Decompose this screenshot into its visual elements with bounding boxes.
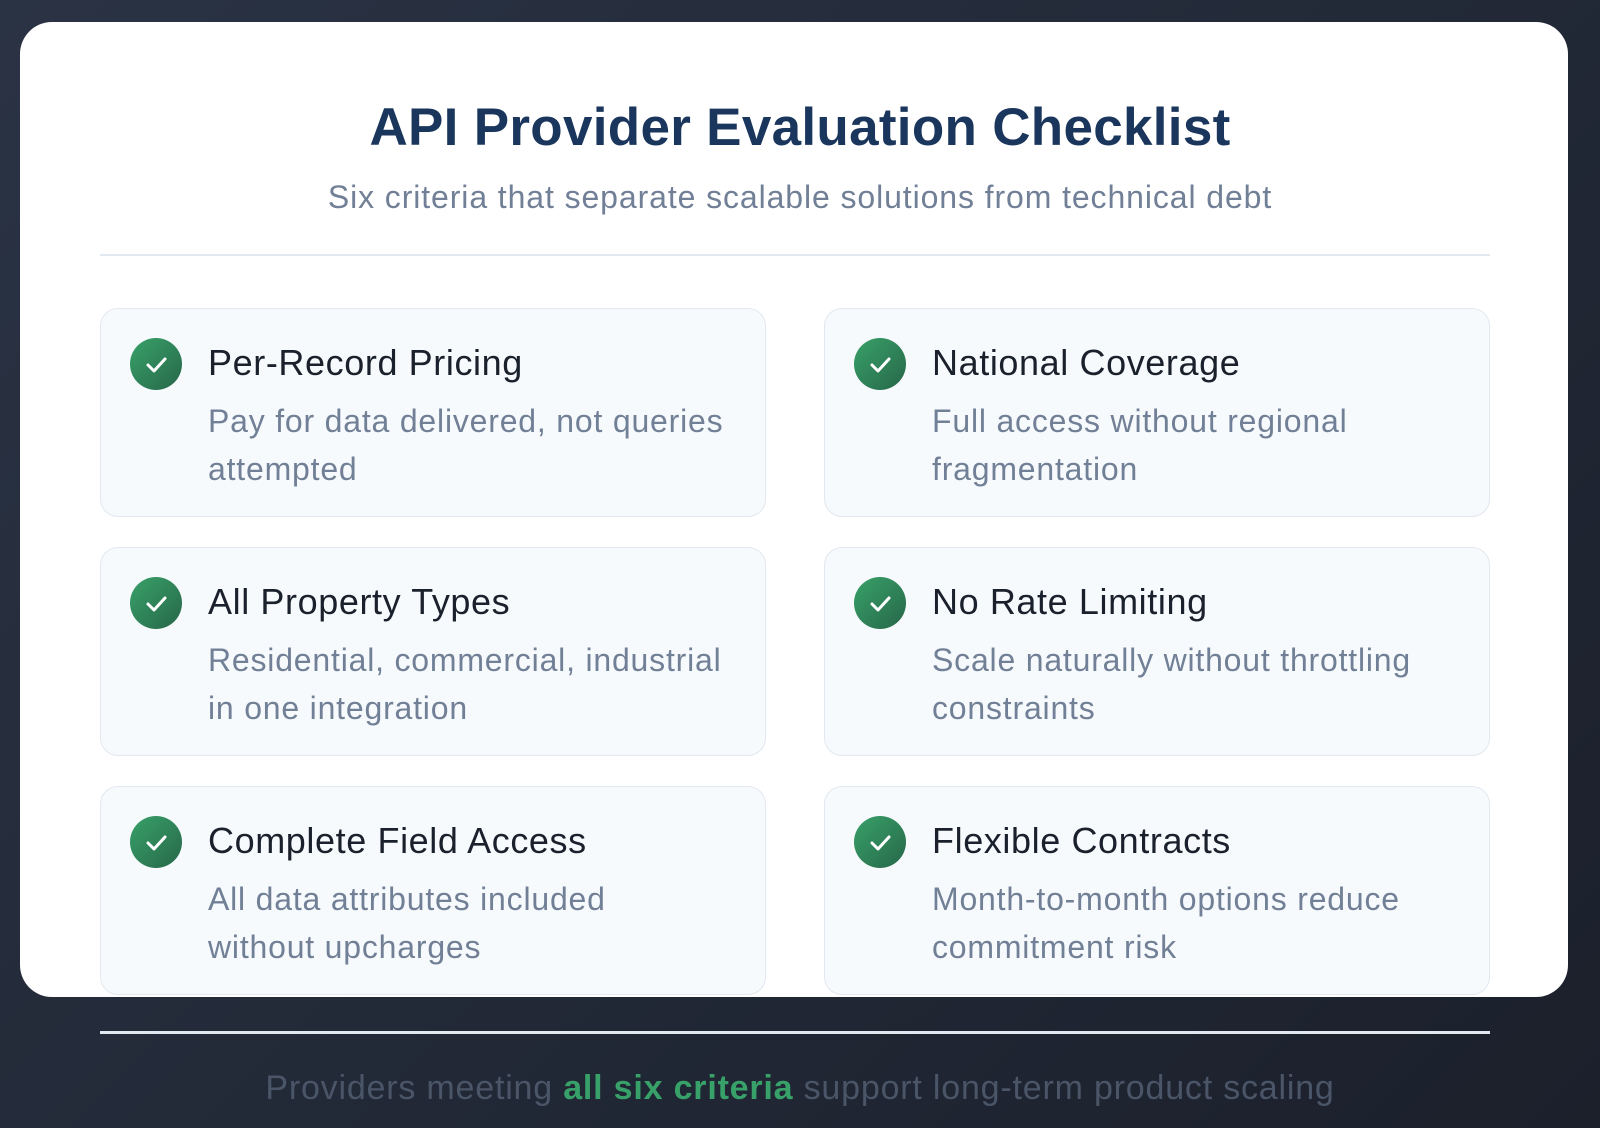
- card: no rate limiting: [824, 547, 1490, 756]
- card text: Month-to-month options reduce: [932, 881, 1400, 917]
- card: complete field access: [100, 786, 766, 995]
- card text: commitment risk: [932, 929, 1177, 965]
- card title: Per-Record Pricing: [208, 342, 523, 383]
- card title: Complete Field Access: [208, 820, 587, 861]
- card text: Scale naturally without throttling constraints: [932, 642, 1411, 726]
- card text: Full access without regional fragmentation: [932, 403, 1347, 487]
- card text: [208, 642, 722, 726]
- card text: Residential, commercial, industrial: [208, 642, 722, 678]
- icon: check: [854, 577, 906, 629]
- card: flexible contracts: [824, 786, 1490, 995]
- card text: in one integration: [208, 690, 468, 726]
- card title: Flexible Contracts: [932, 820, 1231, 861]
- card: national coverage: [824, 308, 1490, 517]
- card: per-record pricing: [100, 308, 766, 517]
- subtitle: Six criteria that separate scalable solutions from technical debt: [328, 179, 1272, 215]
- card title: All Property Types: [208, 581, 510, 622]
- icon: check: [130, 338, 182, 390]
- card text: without upcharges: [208, 929, 481, 965]
- icon: check: [854, 816, 906, 868]
- card: all property types: [100, 547, 766, 756]
- title: API Provider Evaluation Checklist: [369, 98, 1231, 157]
- card text: All data attributes included: [208, 881, 606, 917]
- card title: National Coverage: [932, 342, 1240, 383]
- card title: No Rate Limiting: [932, 581, 1208, 622]
- card text: Pay for data delivered, not queries attempted: [208, 403, 723, 487]
- icon: check: [130, 816, 182, 868]
- card text: [932, 881, 1400, 965]
- card text: [208, 881, 606, 965]
- icon: check: [854, 338, 906, 390]
- icon: check: [130, 577, 182, 629]
- footer statement: Providers meeting all six criteria support long-term product scaling: [265, 1069, 1335, 1107]
